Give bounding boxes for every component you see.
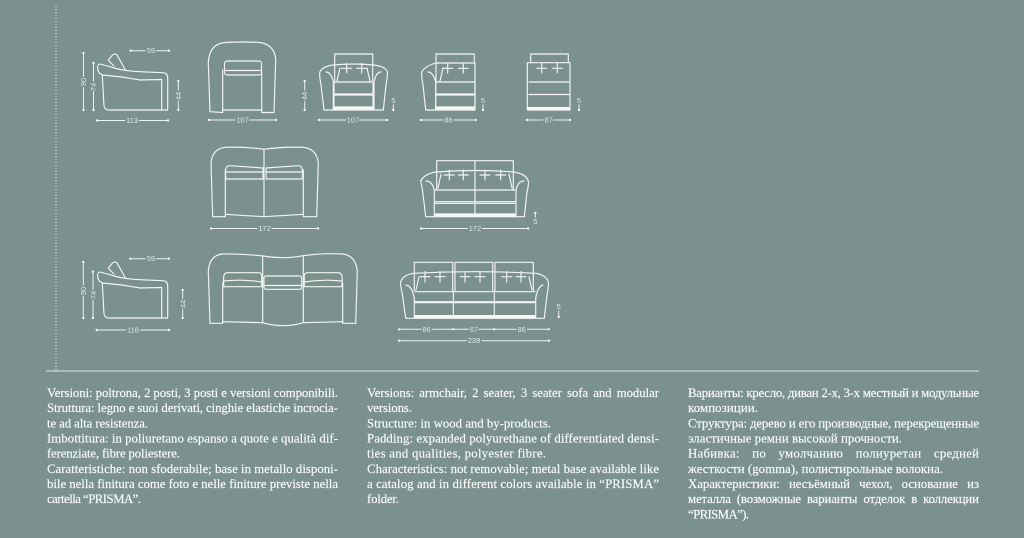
three-seater front view with dimensions: 86: [423, 325, 431, 334]
armchair front view: 107: [347, 116, 359, 124]
text block: Russian: композиции.: [688, 401, 758, 415]
text block: English: versions.: [367, 401, 412, 415]
module front view with one arm: 86: [444, 116, 453, 124]
text block: English: Characteristics: not removable; metal base available like: [367, 462, 659, 476]
two-seater front view: [421, 161, 537, 233]
text block: Italian: te ad alta resistenza.: [47, 416, 148, 430]
armchair top view: [208, 42, 276, 124]
three-seater side view with dimensions: 90: [79, 287, 88, 295]
text block: English: Structure: in wood and by-products.: [367, 416, 551, 430]
two-seater front view: 5: [533, 217, 537, 226]
two-seater top view: 172: [258, 224, 271, 233]
three-seater front view with dimensions: 5: [557, 302, 561, 311]
text block: English: Versions: armchair, 2 seater, 3 seater sofa and modular: [367, 386, 660, 400]
three-seater front view with dimensions: 67: [470, 325, 478, 334]
text block: Russian: жесткости (gomma), полистирольные волокна.: [687, 462, 943, 476]
module front view with one arm: [421, 54, 485, 124]
text block: Italian: cartella “PRISMA”.: [47, 492, 141, 506]
three-seater side view with dimensions: 116: [127, 326, 139, 334]
text block: Italian: Caratteristiche: non sfoderabile; base in metallo disponi-: [47, 462, 338, 476]
text block: English: Padding: expanded polyurethane of differentiated densi-: [367, 432, 659, 446]
armchair side view with dimensions: [79, 46, 183, 125]
armchair front view: 44: [300, 92, 309, 100]
text block: Russian: Варианты: кресло, диван 2-х, 3-х местный и модульные: [688, 386, 979, 400]
text block: Italian: [47, 386, 338, 506]
armchair side view with dimensions: 44: [174, 92, 183, 100]
three-seater side view with dimensions: 44: [178, 300, 188, 308]
text block: Italian: Struttura: legno e suoi derivati, cinghie elastiche incrocia-: [47, 401, 338, 415]
armchair front view: 5: [391, 96, 395, 105]
armchair front view: [300, 54, 395, 124]
text block: Russian: металла (возможные варианты отделок в коллекции: [688, 492, 979, 506]
text block: Italian: Imbottitura: in poliuretano espanso a quote e qualità dif-: [47, 432, 338, 446]
module front view with one arm: 5: [481, 96, 485, 105]
text block: Russian: Характеристики: несъёмный чехол, основание из: [688, 477, 979, 491]
text block: English: [367, 386, 660, 506]
text block: Italian: ferenziate, fibre poliestere.: [47, 447, 180, 461]
two-seater front view: 172: [469, 224, 481, 233]
three-seater top view: [208, 254, 357, 326]
armless module front view: 87: [544, 116, 553, 124]
three-seater side view with dimensions: 59: [147, 254, 155, 263]
armchair side view with dimensions: 113: [126, 116, 138, 125]
armless module front view: [527, 54, 581, 124]
three-seater side view with dimensions: 74: [89, 291, 98, 299]
two-seater top view: [211, 147, 318, 233]
text block: English: a catalog and in different colors available in “PRISMA”: [367, 477, 659, 491]
text block: Italian: bile nella finitura come foto e nelle finiture previste nella: [47, 477, 338, 491]
text block: English: folder.: [367, 492, 399, 506]
text block: Russian: “PRISMA”).: [688, 507, 749, 521]
armchair side view with dimensions: 74: [89, 83, 98, 91]
three-seater front view with dimensions: [399, 262, 561, 345]
text block: Russian: Набивка: по умолчанию полиуретан средней: [688, 447, 979, 461]
text block: Italian: Versioni: poltrona, 2 posti, 3 posti e versioni componibili.: [47, 386, 338, 400]
three-seater front view with dimensions: 239: [468, 336, 480, 345]
three-seater side view with dimensions: [79, 254, 188, 334]
armless module front view: 5: [577, 96, 581, 105]
three-seater front view with dimensions: 86: [518, 325, 526, 334]
armchair top view: 107: [236, 116, 249, 124]
text block: Russian: эластичные ремни высокой прочности.: [688, 432, 902, 446]
armchair side view with dimensions: 59: [147, 46, 155, 55]
text block: Russian: [687, 386, 979, 521]
armchair side view with dimensions: 90: [79, 78, 88, 86]
text block: Russian: Структура: дерево и его производные, перекрещенные: [688, 416, 979, 430]
text block: English: ties and qualities, polyester fibre.: [367, 447, 546, 461]
